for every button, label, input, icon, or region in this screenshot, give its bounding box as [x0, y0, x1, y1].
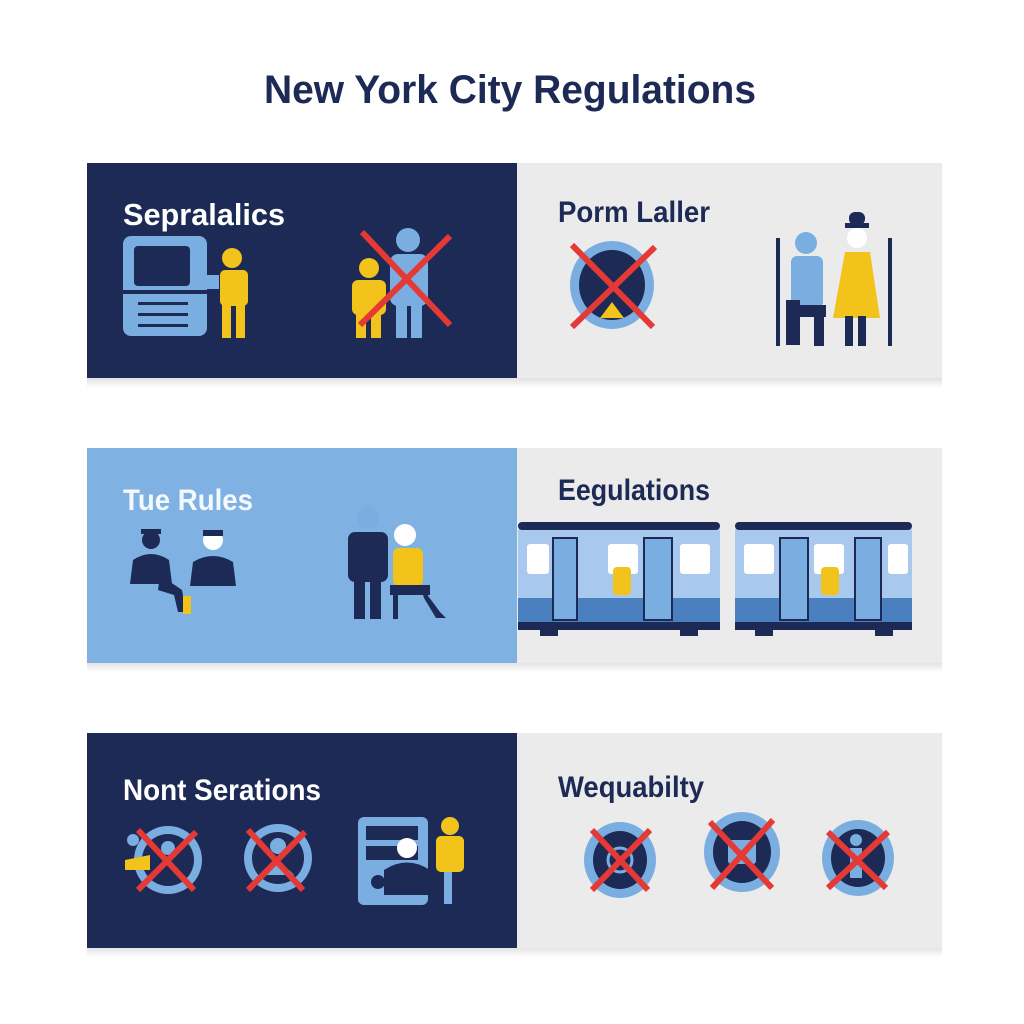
heading: Nont Serations: Nont Serations — [123, 774, 321, 807]
heading: Sepralalics: Sepralalics — [123, 197, 285, 232]
icon: subway car 2 — [735, 522, 912, 636]
icon: crossed sign A — [584, 822, 656, 898]
heading: Eegulations: Eegulations — [558, 474, 710, 507]
heading: Tue Rules: Tue Rules — [123, 484, 253, 517]
title: New York City Regulations — [264, 68, 756, 112]
icon: crossed people — [352, 228, 450, 338]
icon: kiosk with worker — [358, 817, 464, 905]
panel: row 1 left — [87, 163, 942, 388]
panel: row 2 right — [517, 448, 942, 663]
icon: seated passengers between poles — [776, 212, 892, 346]
heading: Wequabilty: Wequabilty — [558, 771, 704, 804]
icon: standing and seated person — [348, 507, 446, 619]
icon: kiosk with attendant — [123, 236, 248, 338]
icon: crossed sign 1 — [125, 826, 202, 894]
panel: row 3 left — [87, 733, 942, 957]
icon: crossed sign C — [822, 820, 894, 896]
icon: crossed sign 2 — [244, 824, 312, 892]
icon: crossed sign B — [704, 812, 780, 892]
icon: two seated officers — [130, 529, 236, 614]
icon: subway car 1 — [518, 522, 720, 636]
icon: crossed circle sign — [570, 241, 655, 329]
panel: row 1 right — [517, 163, 942, 378]
panel: row 3 right — [517, 733, 942, 948]
heading: Porm Laller: Porm Laller — [558, 196, 710, 229]
panel: row 2 left — [87, 448, 942, 672]
